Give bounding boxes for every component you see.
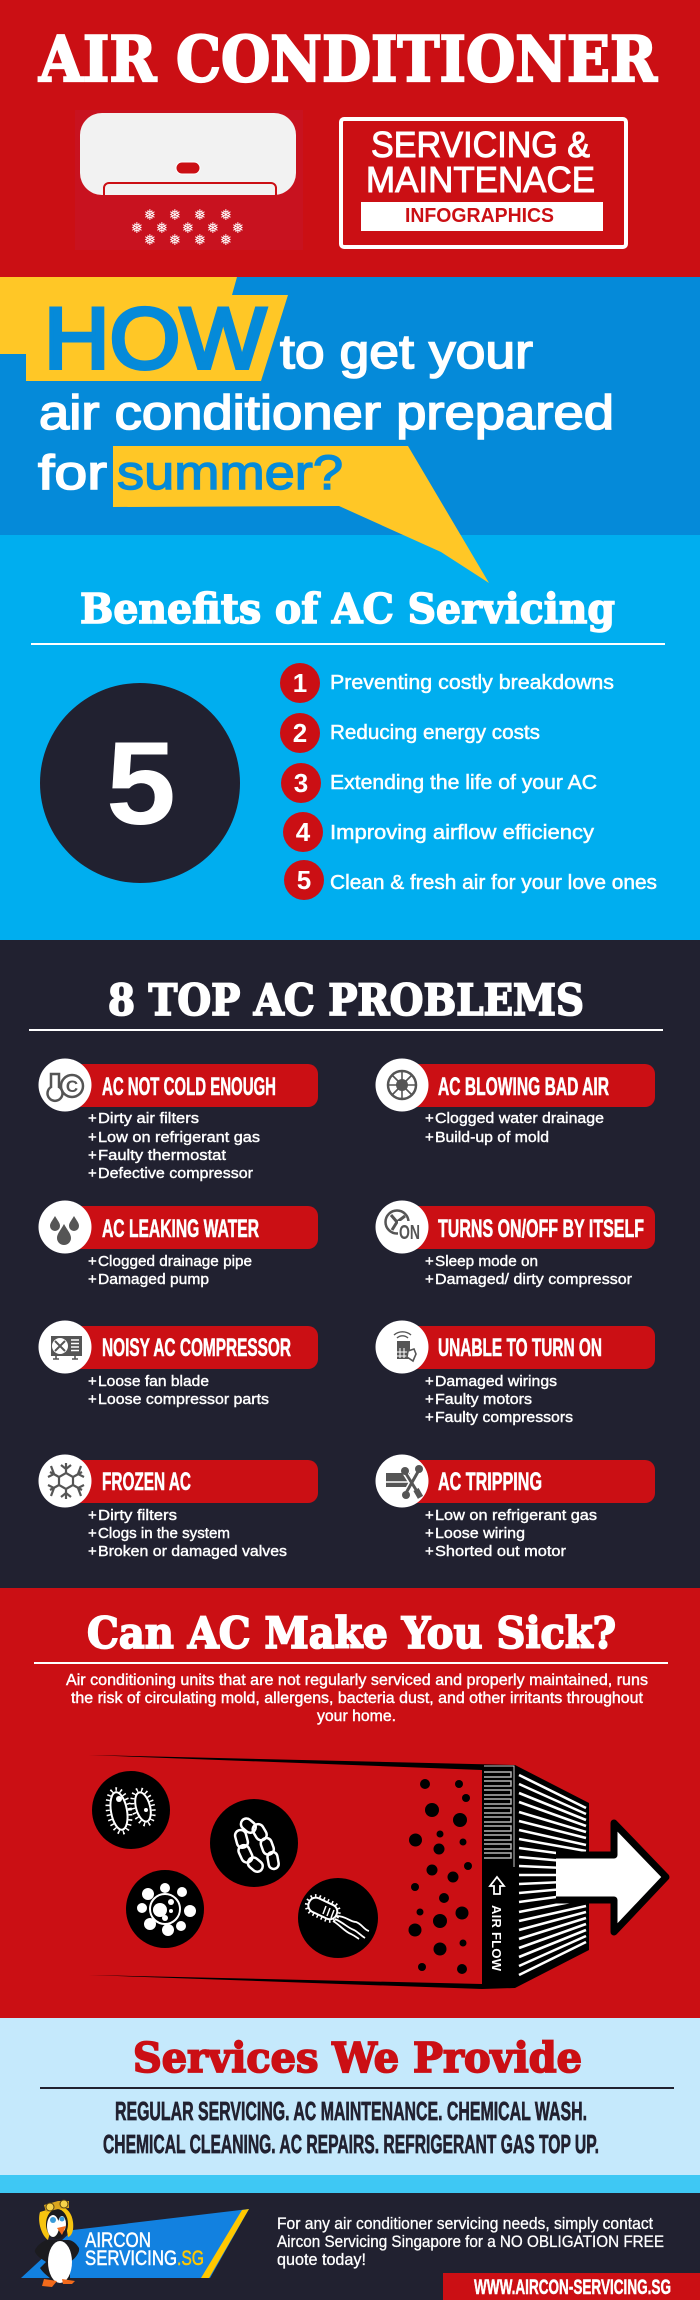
problem: frozen AC: + [88,1507,97,1524]
problem: AC not cold enough: Defective compressor [98,1165,253,1182]
heading: Can AC Make You Sick? [87,1609,616,1659]
headline: air conditioner prepared [39,387,614,440]
panel: footer [0,2193,700,2300]
logo: Aircon Servicing SG [21,2200,249,2287]
benefit 2 [280,713,540,753]
benefit 1 [280,663,614,703]
icon: snowflakes: ❅ [182,219,194,237]
problem: unable to turn on: + [425,1373,434,1390]
benefit 2: Reducing energy costs [330,722,540,744]
yellow speech callout: summer [113,446,489,583]
problem: noisy AC compressor: NOISY AC COMPRESSOR [102,1334,291,1362]
problem: AC not cold enough: AC NOT COLD ENOUGH [102,1073,276,1101]
headline [38,291,614,500]
problem: noisy AC compressor: Loose compressor parts [98,1391,269,1408]
contact text: For any air conditioner servicing needs, simply contact [277,2214,653,2233]
problem: frozen AC: + [88,1543,97,1560]
services list [103,2096,599,2159]
icon: snowflakes: ❅ [194,206,206,224]
icon: snowflakes: ❅ [220,206,232,224]
problem: AC tripping: Shorted out motor [435,1543,566,1560]
germ circle: chain bacteria [210,1799,298,1887]
benefit 4 [283,812,594,852]
panel: header [0,0,700,277]
problem: AC tripping: + [425,1525,434,1542]
problem: noisy AC compressor: + [88,1373,97,1390]
benefit 1: 1 [293,668,307,698]
problem: unable to turn on [376,1320,655,1426]
icon: snowflakes: ❅ [156,219,168,237]
icon: fan with ON label: ON [399,1222,420,1244]
problem: AC blowing bad air: Clogged water drainage [435,1110,604,1127]
panel: benefits of AC servicing [0,535,700,940]
arrow [556,1823,666,1932]
paragraph [66,1672,648,1725]
problem: AC not cold enough: Low on refrigerant gas [98,1129,260,1146]
panel: services we provide [0,2018,700,2175]
germ circle: flagellated bacterium [298,1878,378,1958]
air filter [482,1765,589,1988]
problem: AC leaking water: AC LEAKING WATER [102,1215,259,1243]
problem: unable to turn on: + [425,1409,434,1426]
icon: snowflakes: ❅ [169,206,181,224]
problem: frozen AC: + [88,1525,97,1542]
problem: AC not cold enough: + [88,1110,97,1127]
logo text [85,2229,204,2270]
small up arrow icon [490,1877,504,1894]
logo text: .SG [177,2247,204,2270]
problem: AC blowing bad air: Build-up of mold [435,1129,549,1146]
icon: remote control in hand [394,1332,416,1361]
problem: unable to turn on: Damaged wirings [435,1373,557,1390]
icon: snowflakes: ❅ [220,231,232,249]
problem: AC not cold enough: Dirty air filters [98,1110,199,1127]
icon: AC unit with tools [386,1465,423,1499]
problem: turns on/off by itself [376,1200,655,1288]
big number circle [40,683,240,883]
problem: AC not cold enough: + [88,1165,97,1182]
problem: AC leaking water: Damaged pump [98,1271,209,1288]
problem: turns on/off by itself: + [425,1253,434,1270]
problem: frozen AC [38,1454,318,1560]
icon: snowflakes [131,206,244,249]
problem: AC not cold enough: + [88,1129,97,1146]
blue divider strip [0,2175,700,2193]
benefit 5: Clean & fresh air for your love ones [330,872,657,894]
germ circle: bacteria pair [92,1771,170,1849]
headline: summer? [117,447,343,500]
contact text: quote today! [277,2250,366,2269]
icon: penguin mascot [35,2200,79,2287]
heading: 8 TOP AC PROBLEMS [108,976,584,1026]
yellow highlight: HOW [0,277,288,381]
air filter illustration [89,1755,666,1989]
problem: AC not cold enough: + [88,1147,97,1164]
icon: snowflakes: ❅ [194,231,206,249]
panel: 8 top AC problems [0,940,700,1588]
icon: snowflakes: ❅ [232,219,244,237]
icon: snowflakes: ❅ [144,206,156,224]
icon: water drops [50,1216,79,1245]
problem: AC tripping [376,1454,655,1560]
benefit 5: 5 [297,865,311,895]
problem: turns on/off by itself: Sleep mode on [435,1253,538,1270]
problem: AC blowing bad air [376,1058,655,1146]
problem: noisy AC compressor [38,1320,318,1408]
problem: AC tripping: Loose wiring [435,1525,525,1542]
problem: AC leaking water [38,1200,318,1288]
problem: noisy AC compressor: + [88,1391,97,1408]
icon: snowflakes: ❅ [144,231,156,249]
big number circle: 5 [106,718,176,850]
problem: AC tripping: + [425,1543,434,1560]
headline: HOW [44,291,266,387]
headline: to get your [280,326,533,379]
problem: AC blowing bad air: + [425,1110,434,1127]
servicing and maintenance badge [341,119,626,247]
problem: unable to turn on: Faulty compressors [435,1409,573,1426]
servicing and maintenance badge: SERVICING & [371,124,590,165]
benefit 3: Extending the life of your AC [330,772,597,794]
icon: fan with germ [388,1071,416,1099]
servicing and maintenance badge: INFOGRAPHICS [405,205,554,227]
icon: snowflakes: ❅ [207,219,219,237]
icon: air conditioner unit [75,110,303,250]
air flow label: AIR FLOW [489,1905,504,1972]
benefit 3: 3 [294,768,308,798]
panel: can AC make you sick [0,1588,700,2018]
icon: outdoor compressor unit [51,1336,82,1359]
duct lines [89,1755,515,1989]
problem: AC tripping: + [425,1507,434,1524]
dust particles [408,1779,472,1974]
problem: unable to turn on: UNABLE TO TURN ON [438,1334,602,1362]
logo text: SERVICING [85,2247,177,2270]
icon: thermometer and celsius: C [66,1077,78,1096]
icon: fan with ON label [386,1210,422,1244]
icon: snowflakes: ❅ [169,231,181,249]
icon: snowflake [48,1463,84,1499]
benefit 4: 4 [296,817,311,847]
headline: for [38,447,107,500]
problem: AC tripping: Low on refrigerant gas [435,1507,597,1524]
contact text: Aircon Servicing Singapore for a NO OBLIGATION FREE [277,2232,664,2251]
problem: frozen AC: Clogs in the system [98,1525,230,1542]
problem: AC blowing bad air: + [425,1129,434,1146]
heading: Benefits of AC Servicing [80,585,615,633]
problem: AC leaking water: Clogged drainage pipe [98,1253,252,1270]
problem: unable to turn on: + [425,1391,434,1408]
problem: noisy AC compressor: Loose fan blade [98,1373,209,1390]
problem: turns on/off by itself: Damaged/ dirty compressor [435,1271,632,1288]
logo text: AIRCON [85,2229,151,2252]
paragraph: the risk of circulating mold, allergens, bacteria dust, and other irritants throughout [71,1690,644,1707]
icon: snowflakes: ❅ [131,219,143,237]
benefit 5 [284,860,657,900]
contact text [277,2214,664,2269]
benefit 4: Improving airflow efficiency [330,822,594,844]
icon: thermometer and celsius [48,1074,83,1101]
problem: AC leaking water: + [88,1253,97,1270]
germ circle: virus [126,1870,204,1948]
problem: AC not cold enough [38,1058,318,1182]
problem: frozen AC: Dirty filters [98,1507,177,1524]
problem: AC not cold enough: Faulty thermostat [98,1147,227,1164]
problem: turns on/off by itself: + [425,1271,434,1288]
paragraph: Air conditioning units that are not regularly serviced and properly maintained, runs [66,1672,648,1689]
paragraph: your home. [317,1708,396,1725]
problem: frozen AC: FROZEN AC [102,1468,191,1496]
benefit 3 [281,763,597,803]
problem: frozen AC: Broken or damaged valves [98,1543,287,1560]
servicing and maintenance badge: MAINTENACE [366,159,595,200]
benefit 2: 2 [293,718,307,748]
panel: how to prepare for summer [0,277,700,583]
benefit 1: Preventing costly breakdowns [330,672,614,694]
problem: AC leaking water: + [88,1271,97,1288]
problem: unable to turn on: Faulty motors [435,1391,532,1408]
heading: Services We Provide [133,2034,582,2082]
problem: AC tripping: AC TRIPPING [438,1468,542,1496]
